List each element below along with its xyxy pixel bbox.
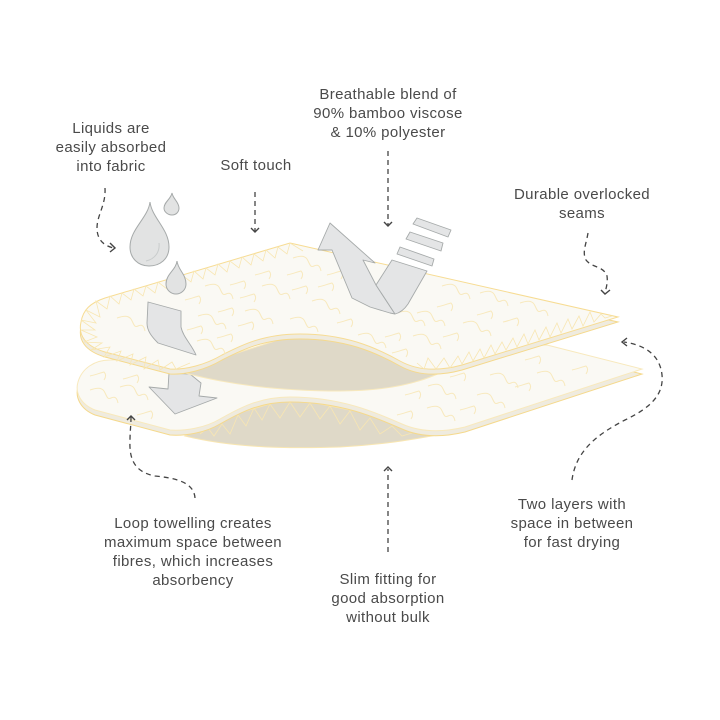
arrow: breathable — [384, 151, 392, 226]
top fabric layer — [80, 243, 618, 374]
top overlocked seam right — [417, 312, 612, 369]
icon: down arrow lower part — [149, 373, 217, 414]
arrow: loop towelling — [127, 416, 195, 498]
icon: small water drop — [164, 193, 179, 215]
text: durable seams: seams — [559, 205, 605, 222]
text: breathable blend: Breathable blend of — [319, 86, 457, 103]
top layer cavity — [185, 333, 442, 391]
icon: medium water drop — [166, 261, 186, 294]
top layer squiggles — [117, 256, 548, 357]
top overlocked seam left — [81, 243, 303, 370]
bottom layer thickness — [77, 350, 642, 436]
bottom layer surface — [77, 345, 642, 431]
text: liquids: into fabric — [76, 158, 146, 175]
icon: down arrow upper part — [147, 302, 196, 355]
bottom cavity stitching — [200, 402, 412, 436]
text: two layers: space in between — [511, 515, 633, 532]
text: two layers: for fast drying — [524, 534, 620, 551]
top layer thickness — [80, 248, 618, 374]
arrow: seams — [584, 233, 610, 294]
text: loop towelling: maximum space between — [104, 534, 282, 551]
text: loop towelling: absorbency — [152, 572, 234, 589]
text: slim fitting: good absorption — [331, 590, 445, 607]
icon: vent stripe 1 — [413, 218, 451, 237]
bottom layer squiggles — [90, 356, 588, 421]
icon: breathable arrow up — [318, 223, 395, 314]
arrow: slim fitting — [384, 467, 392, 552]
text: loop towelling: Loop towelling creates — [114, 515, 272, 532]
bottom cavity — [185, 398, 437, 448]
text: breathable blend: & 10% polyester — [331, 124, 445, 141]
text: slim fitting: Slim fitting for — [340, 571, 436, 588]
icon: large water drop — [130, 202, 169, 266]
text: breathable blend: 90% bamboo viscose — [313, 105, 463, 122]
text: liquids: Liquids are — [72, 120, 150, 137]
text: two layers: Two layers with — [518, 496, 626, 513]
icon: breathable arrow return — [376, 260, 427, 314]
text: loop towelling: fibres, which increases — [113, 553, 273, 570]
text: liquids: easily absorbed — [56, 139, 166, 156]
icon: vent stripe 3 — [397, 247, 434, 266]
bottom fabric layer — [77, 345, 642, 448]
arrow: liquids — [97, 188, 115, 252]
arrow: soft touch — [251, 192, 259, 232]
text: soft touch: Soft touch — [220, 157, 292, 174]
arrow: two layers — [572, 338, 662, 480]
top layer surface — [80, 243, 618, 369]
icon: vent stripe 2 — [406, 232, 443, 251]
text: slim fitting: without bulk — [345, 609, 430, 626]
text: durable seams: Durable overlocked — [514, 186, 650, 203]
